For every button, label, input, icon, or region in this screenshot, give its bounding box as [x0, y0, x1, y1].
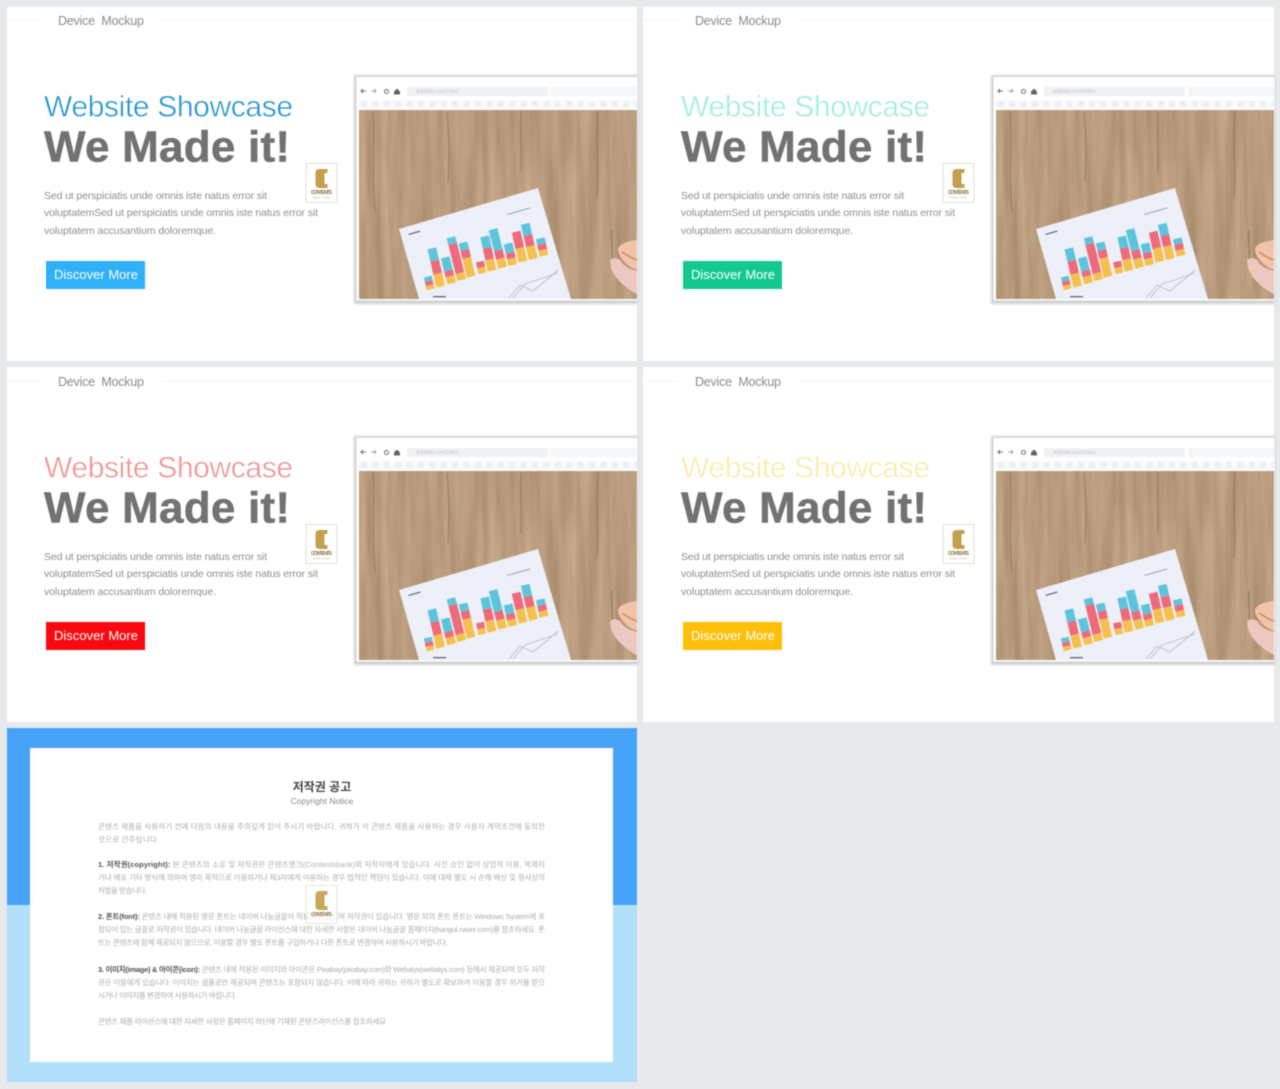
- panel: copyright notice: [7, 728, 637, 1082]
- panel: red showcase slide: [7, 367, 638, 722]
- section label: Device Mockup: [58, 14, 144, 28]
- section 2: font: 트는 콘텐츠에 함께 제공되지 않으므로, 이용할 경우 별도 폰트를 구입하거나 다른 폰트로 변경하여 사용하시기 바랍니다.: [98, 937, 448, 947]
- browser address: dribbble.com/23kor: [1053, 450, 1096, 456]
- text block: voluptatem accusantium doloremque.: [681, 225, 853, 237]
- logo watermark: REAL LOOK: [950, 556, 967, 560]
- logo watermark: [306, 164, 337, 202]
- text block: voluptatemSed ut perspiciatis unde omnis iste natus error sit: [44, 568, 318, 580]
- logo watermark: [306, 524, 337, 564]
- section 2: font: 2. 폰트(font): 콘텐츠 내에 적용된 영문 폰트는 네이버 나눔글꼴이 적용되어 있으며 저작권이 있습니다. 영문 외의 폰트 폰트는 Windows System에 포: [98, 911, 545, 921]
- heading: Website Showcase: Website Showcase: [44, 452, 293, 484]
- text block: Sed ut perspiciatis unde omnis iste natus error sit: [44, 551, 267, 563]
- button: Discover More: Discover More: [691, 267, 775, 282]
- section 3: image and icon: 권은 이들에게 있습니다. 이미지는 샘플로만 제공되며 콘텐츠는 포함되지 않습니다. 이에 따라 귀하는 귀하가 별도로 확보하여 이용할 경우 허가를 받으: [98, 977, 545, 987]
- logo watermark: [943, 164, 974, 202]
- intro text: 것으로 간주됩니다.: [98, 834, 159, 844]
- text block: [44, 190, 318, 237]
- browser mockup with chart photo: [354, 436, 638, 665]
- text block: voluptatem accusantium doloremque.: [681, 586, 853, 598]
- button: Discover More: [46, 261, 145, 289]
- browser mockup with chart photo: [991, 436, 1275, 665]
- text block: Sed ut perspiciatis unde omnis iste natus error sit: [44, 190, 267, 202]
- section 3: image and icon: [98, 964, 545, 1000]
- logo watermark: REAL LOOK: [313, 556, 330, 560]
- browser mockup with chart photo: [991, 75, 1275, 304]
- section label: Device Mockup: [58, 375, 144, 389]
- text block: [681, 551, 955, 598]
- section 1: copyright: 1. 저작권(copyright): 본 콘텐츠의 소유 및 저작권은 콘텐츠뱅크(Contentsbank)와 저작자에게 있습니다. 사전 승인 없이 상업적 이용, 복제하: [98, 859, 545, 869]
- panel: blue showcase slide: [7, 7, 638, 361]
- closing note: 콘텐츠 제품 라이선스에 대한 자세한 사항은 홈페이지 하단에 기재된 콘텐츠라이선스를 참조하세요: [98, 1016, 386, 1026]
- heading: We Made it: We Made it!: [44, 484, 290, 532]
- button: Discover More: Discover More: [54, 267, 138, 282]
- text block: Sed ut perspiciatis unde omnis iste natus error sit: [681, 551, 904, 563]
- browser address: dribbble.com/23kor: [416, 89, 459, 95]
- text block: voluptatemSed ut perspiciatis unde omnis iste natus error sit: [681, 568, 955, 580]
- browser address: dribbble.com/23kor: [1053, 89, 1096, 95]
- text block: voluptatemSed ut perspiciatis unde omnis iste natus error sit: [681, 207, 955, 219]
- text block: voluptatem accusantium doloremque.: [44, 225, 216, 237]
- section 2: font: 함되어 있는 글꼴로 저작권이 있습니다. 네이버 나눔글꼴 라이선스에 대한 자세한 사항은 네이버 나눔글꼴 홈페이지(hangul.naver.com)를 참조하세요. 폰: [98, 924, 545, 934]
- browser address: dribbble.com/23kor: [416, 450, 459, 456]
- logo watermark: CONTENTS: [948, 190, 970, 196]
- logo watermark: CONTENTS: [311, 190, 333, 196]
- text block: Sed ut perspiciatis unde omnis iste natus error sit: [681, 190, 904, 202]
- text block: voluptatemSed ut perspiciatis unde omnis iste natus error sit: [44, 207, 318, 219]
- section 2: font: [98, 911, 545, 947]
- button: Discover More: [46, 622, 145, 650]
- logo watermark: [943, 524, 974, 564]
- section 1: copyright: [98, 859, 545, 895]
- button: Discover More: [683, 261, 782, 289]
- section 1: copyright: 처벌을 받습니다.: [98, 885, 147, 895]
- heading: We Made it: We Made it!: [44, 122, 290, 172]
- intro text: [98, 821, 545, 844]
- logo watermark: CONTENTS: [311, 912, 333, 918]
- logo watermark: CONTENTS: [948, 551, 970, 557]
- text block: [681, 190, 955, 237]
- heading: Website Showcase: Website Showcase: [681, 452, 930, 484]
- section 3: image and icon: 3. 이미지(image) & 아이콘(icon): 콘텐츠 내에 적용된 이미지와 아이콘은 Pixabay(pixabay.com)와 Webalys(webalys.com) 등에서 제공되며 모두 저작: [98, 964, 545, 974]
- heading: Website Showcase: Website Showcase: [44, 90, 293, 124]
- heading: We Made it: We Made it!: [681, 484, 927, 532]
- button: Discover More: Discover More: [54, 628, 138, 643]
- heading: We Made it: We Made it!: [681, 122, 927, 172]
- logo watermark: CONTENTS: [311, 551, 333, 557]
- notice title: 저작권 공고: [293, 779, 351, 794]
- logo watermark: REAL LOOK: [313, 196, 330, 200]
- section 3: image and icon: 시거나 이미지를 변경하여 사용하시기 바랍니다.: [98, 990, 237, 1000]
- logo watermark: [306, 886, 337, 924]
- notice subtitle: Copyright Notice: [291, 796, 354, 806]
- button: Discover More: [683, 622, 782, 650]
- section label: Device Mockup: [695, 375, 781, 389]
- text block: voluptatem accusantium doloremque.: [44, 586, 216, 598]
- text block: [44, 551, 318, 598]
- browser mockup with chart photo: [354, 75, 638, 304]
- intro text: 콘텐츠 제품을 사용하기 전에 다음의 내용을 주의깊게 읽어 주시기 바랍니다. 귀하가 이 콘텐츠 제품을 사용하는 경우 사용자 계약조건에 동의한: [98, 821, 545, 831]
- logo watermark: REAL LOOK: [950, 196, 967, 200]
- button: Discover More: Discover More: [691, 628, 775, 643]
- section label: Device Mockup: [695, 14, 781, 28]
- heading: Website Showcase: Website Showcase: [681, 90, 930, 124]
- panel: yellow showcase slide: [643, 367, 1275, 722]
- section 1: copyright: 거나 배포 기타 방식에 의하여 영리 목적으로 이용하거나 제3자에게 이용하는 경우 법적인 책임이 있습니다. 이에 대해 별도 시 손해 배상 및 형사상의: [98, 872, 545, 882]
- panel: mint showcase slide: [643, 7, 1275, 361]
